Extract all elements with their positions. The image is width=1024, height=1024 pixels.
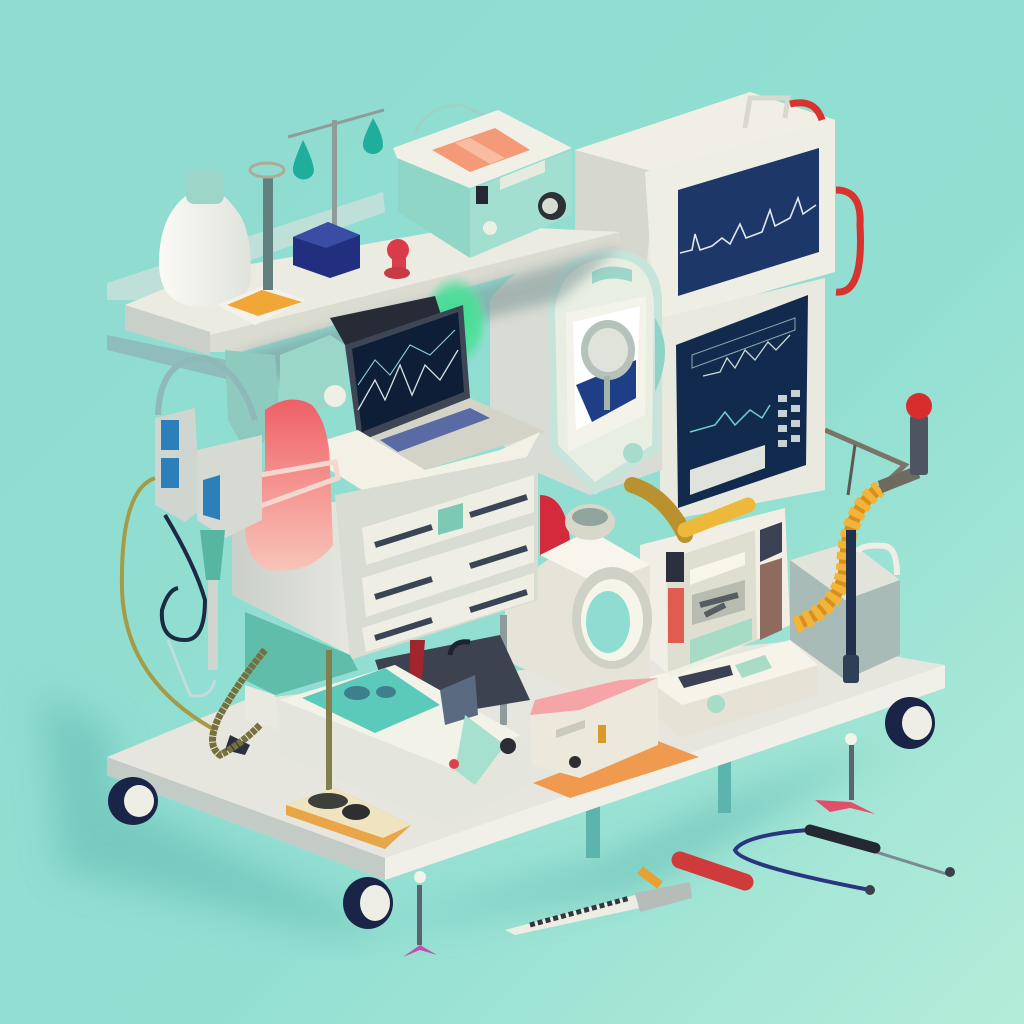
lower monitor bbox=[660, 278, 825, 518]
yellow hose left bbox=[122, 478, 215, 730]
thin pole bbox=[326, 650, 332, 790]
central oval device with brain scan bbox=[490, 248, 665, 495]
yellow coiled cable bbox=[795, 488, 880, 625]
base box bbox=[530, 678, 658, 778]
red bag bbox=[540, 495, 570, 556]
teal box under cabinet bbox=[225, 612, 358, 755]
gold connector arm bbox=[632, 485, 748, 535]
wheel: back left bbox=[108, 777, 158, 825]
top shelf bbox=[107, 192, 620, 420]
wheel: right bbox=[885, 697, 935, 749]
blue papers bbox=[358, 490, 418, 512]
low analyzer box bbox=[645, 640, 818, 738]
grey box right bbox=[790, 542, 900, 680]
top monitor bbox=[575, 92, 860, 322]
syringe bbox=[505, 870, 692, 935]
magnifier stand bbox=[217, 163, 305, 325]
wheel: front bbox=[343, 877, 393, 929]
braided cable bbox=[212, 650, 265, 755]
washer style device bbox=[505, 504, 652, 700]
dark equipment behind scanner bbox=[375, 615, 530, 725]
pink bag bbox=[243, 400, 338, 571]
orange mat bbox=[533, 738, 699, 798]
small pin front bbox=[403, 871, 437, 957]
floor shadow bbox=[40, 690, 900, 935]
red stamp bbox=[384, 239, 410, 279]
mint equipment behind laptop bbox=[225, 296, 442, 460]
instrument rack bbox=[640, 508, 790, 677]
small pin right bbox=[815, 733, 875, 814]
drawer cabinet bbox=[232, 455, 538, 660]
support legs bbox=[586, 750, 731, 858]
red tube bbox=[680, 860, 745, 882]
blue block bbox=[293, 222, 360, 278]
laptop bbox=[345, 305, 546, 470]
loose stethoscope bbox=[735, 830, 955, 895]
IV stand with drops bbox=[288, 110, 384, 230]
scanner base machine bbox=[280, 665, 530, 825]
stethoscope hanging bbox=[162, 515, 225, 696]
dark pole bbox=[843, 445, 859, 683]
shadow beneath shelf bbox=[240, 246, 620, 390]
desk surface bbox=[325, 430, 540, 495]
green glow bbox=[421, 274, 489, 370]
lever arm with red knob bbox=[825, 393, 932, 488]
cart platform bbox=[107, 640, 945, 880]
white bottle bbox=[159, 170, 251, 307]
wall mounted monitors bbox=[155, 358, 262, 538]
yellow base plate with fixture bbox=[286, 788, 411, 849]
top teal device bbox=[393, 105, 572, 258]
